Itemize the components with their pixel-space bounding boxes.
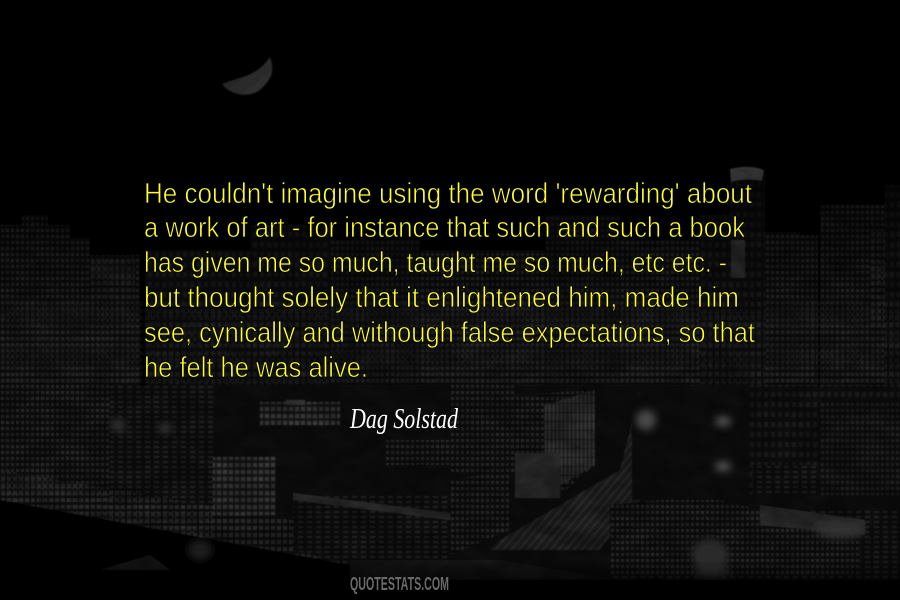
skyline fade xyxy=(0,165,900,330)
city lights xyxy=(111,410,865,578)
quote text: has given me so much, taught me so much, etc etc. - xyxy=(144,247,727,279)
quote text xyxy=(144,178,755,384)
quote text: see, cynically and withough false expectations, so that xyxy=(144,317,755,349)
quote text: but thought solely that it enlightened him, made him xyxy=(144,282,739,314)
quote text: a work of art - for instance that such and such a book xyxy=(144,212,746,244)
lower city blocks xyxy=(0,385,900,580)
bottom black band xyxy=(0,580,900,600)
city skyline xyxy=(0,172,900,390)
author name: Dag Solstad xyxy=(349,403,458,435)
tower highlights xyxy=(730,167,764,278)
quote text: He couldn't imagine using the word 'rewarding' about xyxy=(144,178,752,210)
watermark: QUOTESTATS.COM xyxy=(350,574,449,594)
quote text: he felt he was alive. xyxy=(144,352,368,384)
moon xyxy=(222,57,272,95)
blotchy shadow overlay xyxy=(0,170,900,580)
